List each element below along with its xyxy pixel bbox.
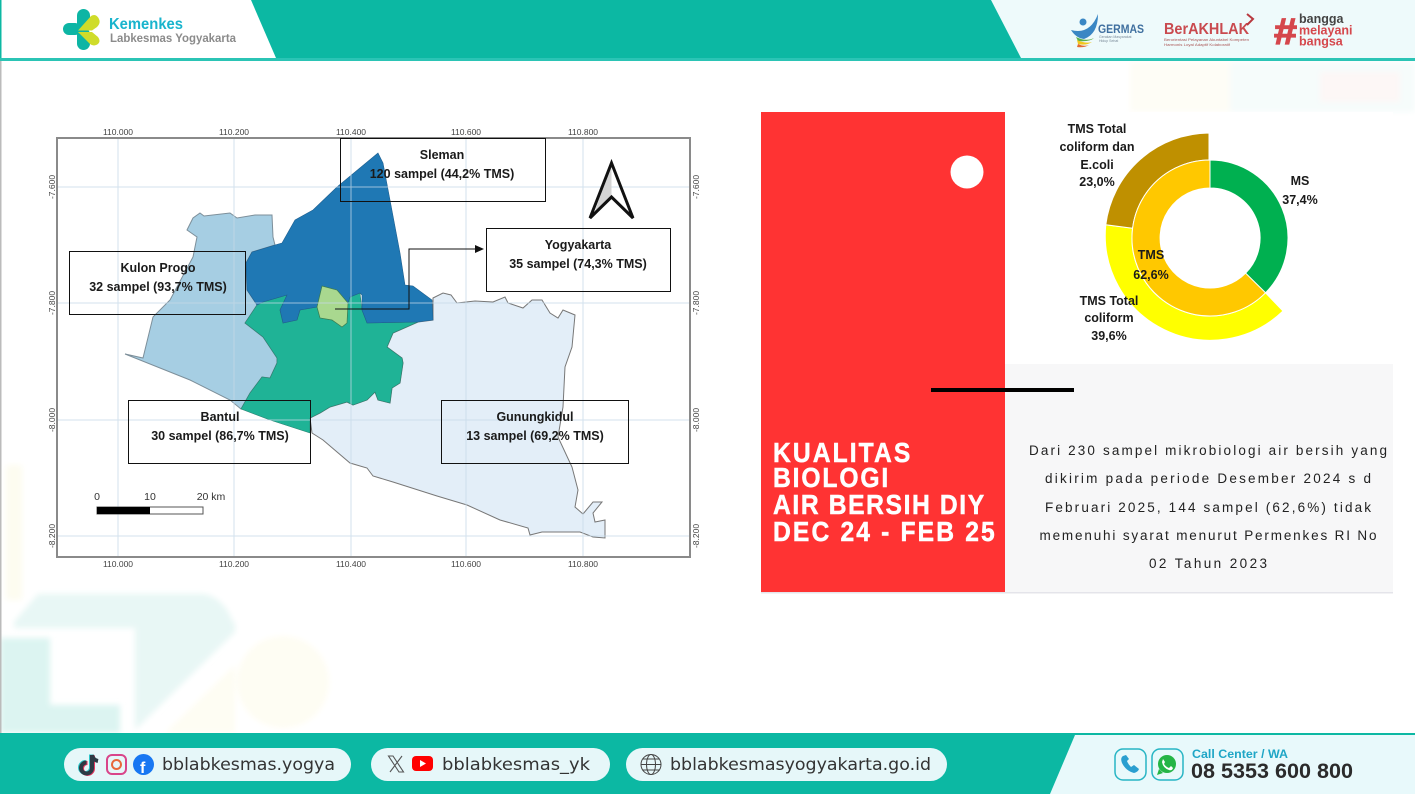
icon: Facebook [133,754,154,777]
logo: BerAKHLAK [1164,14,1253,47]
arrow: Yogyakarta callout [335,245,484,309]
callout: Sleman: Sleman [420,148,464,162]
pill: TikTok Instagram Facebook [64,748,351,781]
label: TMS Total coliform [1080,294,1138,343]
logo: bangga melayani bangsa: melayani [1299,24,1353,38]
callout: Kulon Progo: Kulon Progo [120,261,196,275]
axis labels: -8.200 [47,524,57,548]
axis labels: -7.600 [691,175,701,199]
region: Yogyakarta city [317,286,348,327]
logo: bangga melayani bangsa [1274,11,1353,52]
axis labels: -8.000 [691,408,701,432]
region: Sleman [246,153,433,323]
axis labels: 110.400 [336,127,366,137]
label: TMS [1133,248,1169,282]
axis labels: -7.800 [47,291,57,315]
callout: Bantul: 30 sampel (86,7% TMS) [151,429,289,443]
panel: description background [1005,364,1393,592]
description text: dikirim pada periode Desember 2024 s d [1045,471,1371,486]
icon: phone [1115,749,1146,780]
icon: Facebook: f [140,760,146,777]
title: DEC 24 - FEB 25 [773,516,995,547]
region: Kulon Progo [125,213,277,409]
pill: X YouTube [371,748,610,781]
segment: TMS Total coliform outer [1105,225,1283,340]
logo: GERMAS [1071,14,1144,47]
label: TMS: 62,6% [1133,268,1169,282]
callout: Bantul: Bantul [201,410,239,424]
icon: north arrow [590,163,633,218]
axis labels: 110.800 [568,559,598,569]
callout: Kulon Progo [70,252,246,314]
callout: Gunungkidul: 13 sampel (69,2% TMS) [466,429,604,443]
icon: YouTube [412,756,433,771]
scale bar: 10 [144,491,156,503]
map grid [58,139,689,556]
logo: bangga melayani bangsa: bangga [1299,12,1344,26]
axis labels: 110.800 [568,127,598,137]
axis labels: 110.000 [103,559,133,569]
logo: bangga melayani bangsa: # [1274,11,1297,52]
title [773,437,995,547]
label: TMS Total coliform: TMS Total [1080,294,1138,308]
region: Bantul [241,293,418,433]
icon: X [388,756,404,772]
icon: TikTok [80,754,98,774]
brand name: Kemenkes [109,16,183,33]
callout: Yogyakarta: Yogyakarta [545,238,612,252]
footer band [0,733,1415,794]
axis labels: -7.600 [47,175,57,199]
label: TMS Total coliform dan E.coli: TMS Total [1068,122,1126,136]
segment: TMS [1132,160,1266,316]
axis labels: 110.200 [219,559,249,569]
website text: bblabkesmasyogyakarta.go.id [670,755,931,775]
description text [1029,443,1387,571]
icon: WhatsApp [1152,749,1183,780]
axis labels: -8.000 [47,408,57,432]
panel: map of DIY [47,127,701,569]
logo: BerAKHLAK: Berorientasi Pelayanan Akuntabel Kompeten [1164,38,1249,42]
label: TMS Total coliform dan E.coli: E.coli [1080,158,1114,172]
axis labels: -8.200 [691,524,701,548]
label: MS [1282,174,1318,207]
axis labels [47,127,701,569]
description text: Februari 2025, 144 sampel (62,6%) tidak [1045,500,1371,515]
logo: BerAKHLAK: BerAKHLAK [1164,21,1250,38]
description text: 02 Tahun 2023 [1149,556,1267,571]
icon: Kemenkes leaf mark [63,9,100,50]
description text: memenuhi syarat menurut Permenkes RI No [1040,528,1376,543]
label: MS: MS [1291,174,1309,188]
logo: BerAKHLAK: Harmonis Loyal Adaptif Kolaboratif [1164,43,1230,47]
title: BIOLOGI [773,462,888,493]
axis labels: 110.600 [451,127,481,137]
map frame [57,138,690,557]
logo: GERMAS: Hidup Sehat [1099,39,1118,43]
handle: bblabkesmas.yogya [162,755,335,775]
callout: Sleman [340,138,546,202]
donut chart [1059,122,1318,343]
call center block [1115,747,1353,783]
label: TMS Total coliform dan E.coli [1059,122,1135,189]
callout: Bantul [128,400,310,464]
callout: Gunungkidul [442,400,628,464]
phone number: 08 5353 600 800 [1191,760,1353,783]
label: TMS Total coliform dan E.coli: 23,0% [1079,175,1115,189]
label: TMS Total coliform: 39,6% [1091,329,1127,343]
label: TMS Total coliform dan E.coli: coliform dan [1059,140,1135,154]
icon: Instagram [107,755,126,774]
callout: Gunungkidul: Gunungkidul [496,410,574,424]
label: MS: 37,4% [1282,193,1318,207]
call center label: Call Center / WA [1192,747,1288,761]
callout: Yogyakarta [486,228,670,292]
panel: chart background [1005,112,1393,364]
description text: Dari 230 sampel mikrobiologi air bersih yang [1029,443,1387,458]
axis labels: 110.400 [336,559,366,569]
unit name: Labkesmas Yogyakarta [110,31,236,45]
panel: red title panel [761,112,1005,592]
pill: website [626,748,947,781]
handle: bblabkesmas_yk [442,755,590,775]
logo: bangga melayani bangsa: bangsa [1299,34,1344,48]
decorative circle [950,156,984,188]
scale bar: 0 [94,491,100,503]
header band [0,0,1415,61]
region: Gunungkidul [310,293,605,538]
logo: Kemenkes Labkesmas Yogyakarta [63,9,236,50]
icon: globe [641,754,661,774]
axis labels: 110.000 [103,127,133,137]
scale bar [94,491,226,514]
segment: TMS Total coliform dan E.coli outer [1106,133,1209,228]
logo: GERMAS: Gerakan Masyarakat [1099,35,1132,39]
segment: MS [1210,160,1288,293]
title: KUALITAS [773,437,910,468]
axis labels: 110.600 [451,559,481,569]
logo: GERMAS: GERMAS [1098,22,1144,36]
axis labels: 110.200 [219,127,249,137]
callout: Sleman: 120 sampel (44,2% TMS) [370,167,514,181]
scale bar: 20 km [197,491,226,503]
callout: Yogyakarta: 35 sampel (74,3% TMS) [509,257,647,271]
title: AIR BERSIH DIY [773,489,985,520]
axis labels: -7.800 [691,291,701,315]
black bar [931,388,1074,392]
label: TMS: TMS [1138,248,1164,262]
callout: Kulon Progo: 32 sampel (93,7% TMS) [89,280,227,294]
label: TMS Total coliform: coliform [1084,311,1134,325]
